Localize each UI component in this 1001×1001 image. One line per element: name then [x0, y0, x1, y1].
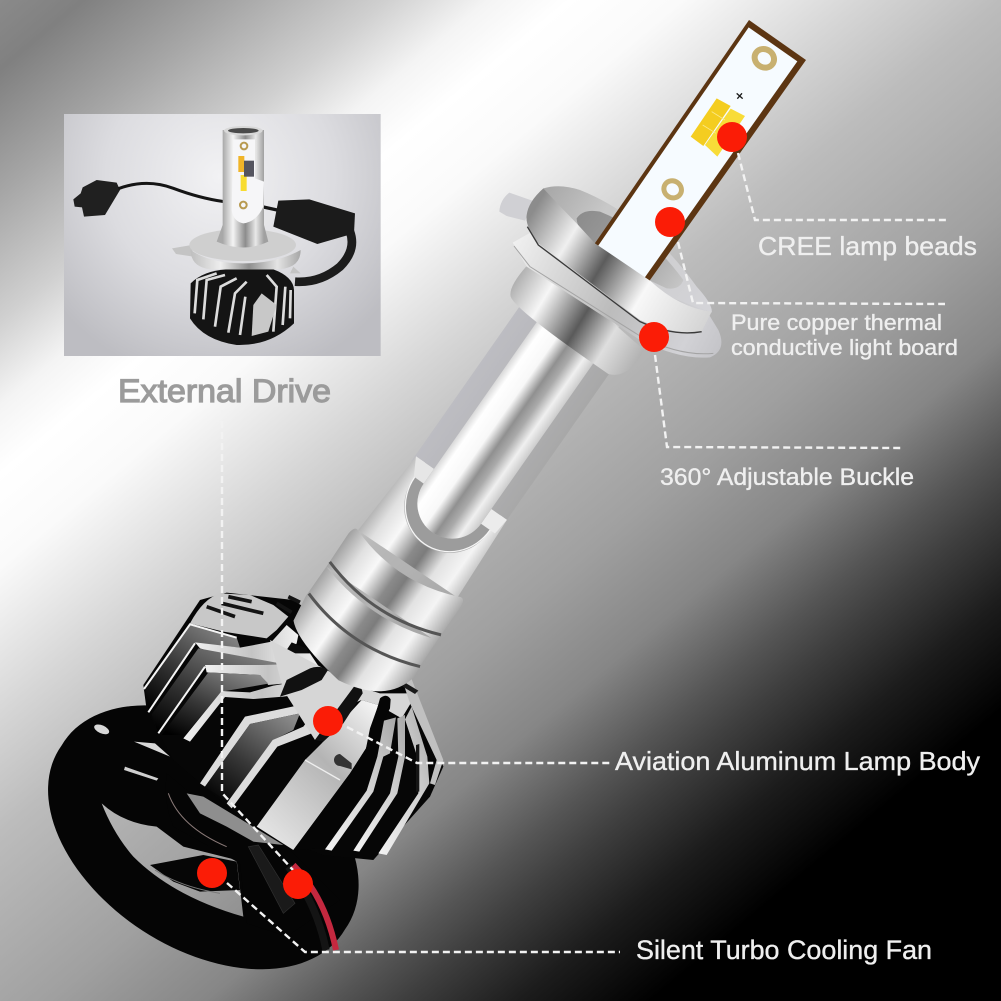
flat plate behind rod	[411, 277, 632, 526]
mount pin	[499, 193, 535, 221]
icon: mini bulb tube	[217, 126, 268, 247]
leader: cooling fan	[227, 883, 620, 952]
wedge below band 3	[162, 672, 268, 735]
fin slit	[416, 744, 419, 792]
heat sink right fins	[257, 640, 443, 855]
label: aluminum body: Aviation Aluminum Lamp Body	[615, 746, 980, 776]
screw recess	[334, 754, 352, 769]
slot near neck	[280, 642, 308, 665]
blade highlight	[155, 870, 220, 893]
label: CREE lamp beads: CREE lamp beads	[758, 231, 977, 261]
dot: aluminum body	[313, 706, 343, 736]
dashed leader lines	[222, 153, 947, 952]
label: cooling fan: Silent Turbo Cooling Fan	[636, 935, 932, 965]
callout labels	[615, 231, 980, 965]
groove 2	[303, 590, 420, 678]
leader: external drive	[222, 410, 293, 870]
solder ring bottom	[661, 177, 685, 201]
neck	[510, 266, 644, 375]
leader: copper board	[678, 242, 945, 304]
dot: copper board	[655, 207, 685, 237]
icon: connector plug	[73, 180, 120, 217]
hub plate	[187, 793, 283, 845]
fin right 3	[378, 707, 429, 855]
fan blade	[150, 855, 240, 892]
band 4	[183, 680, 327, 742]
collar opening	[577, 211, 683, 289]
shade 1	[145, 625, 240, 712]
band 2	[195, 625, 298, 663]
black wire	[288, 867, 326, 950]
icon: mini bulb flange	[172, 229, 301, 273]
wire: plug to bulb	[118, 183, 224, 202]
groove 1	[324, 559, 441, 646]
top cap	[190, 593, 288, 638]
dot: lamp beads	[717, 122, 747, 152]
collar top rim	[543, 186, 712, 313]
plus mark	[737, 93, 743, 99]
solder ring top	[751, 45, 778, 71]
fan base slot 1	[134, 742, 170, 757]
neck collar light	[270, 640, 417, 740]
heat sink left fins	[144, 593, 327, 742]
fan base screw hole	[93, 722, 111, 736]
U-shaped ring	[387, 463, 500, 570]
fin line 3	[158, 667, 205, 733]
leader: CREE lamp beads	[738, 153, 947, 220]
fan base ring	[48, 705, 359, 969]
leader: buckle	[655, 355, 903, 448]
dot: external drive	[283, 869, 313, 899]
leader: aluminum body	[347, 727, 610, 763]
fin right 2	[353, 715, 405, 852]
cable: driver to heat sink	[295, 232, 352, 282]
board white face	[588, 27, 797, 287]
fin E shade	[205, 713, 300, 803]
connector	[248, 845, 295, 913]
fin F	[227, 713, 318, 808]
right slot	[403, 683, 418, 694]
heat sink body	[143, 593, 443, 860]
tail section	[277, 590, 421, 715]
icon: mini bulb heat sink	[190, 269, 294, 345]
wire: bulb to driver	[262, 207, 280, 211]
label: buckle: 360° Adjustable Buckle	[660, 464, 914, 491]
fin line 2	[148, 643, 195, 712]
slot 1	[315, 686, 363, 742]
marker dots	[197, 122, 747, 899]
fin line 1	[144, 624, 237, 689]
LED chip	[691, 98, 745, 157]
centre block	[257, 700, 378, 850]
lower body sleeve	[358, 453, 510, 599]
dot: buckle	[639, 322, 669, 352]
collar wall	[526, 188, 712, 332]
bulb collar and circuit board	[499, 20, 806, 375]
fin right 4	[400, 673, 443, 785]
flange	[513, 223, 721, 358]
central rod	[404, 282, 622, 552]
ring horn left	[406, 456, 434, 484]
bulb tube and body	[276, 263, 649, 715]
fan hub	[166, 773, 340, 937]
hub ring edge	[168, 793, 227, 847]
dot: cooling fan	[197, 858, 227, 888]
board brown edge	[583, 20, 806, 287]
collar groove	[527, 227, 702, 333]
block ridge	[305, 760, 340, 780]
icon: driver box	[273, 199, 355, 244]
label: copper board line 1: Pure copper thermal	[731, 310, 942, 335]
band 3	[205, 653, 320, 685]
fin E	[200, 695, 320, 787]
label: copper board line 2: conductive light board	[731, 335, 958, 360]
heat sink and fan base	[48, 593, 443, 969]
ring horn right	[481, 509, 507, 535]
mid section	[300, 564, 438, 681]
red wire	[293, 865, 336, 950]
shade 2	[152, 648, 285, 733]
panel: external drive photo	[64, 114, 381, 356]
fin right 1	[325, 717, 396, 851]
heading: External Drive: External Drive	[118, 373, 331, 409]
shoulder section	[326, 523, 465, 643]
cap slots	[207, 597, 300, 617]
upper slot	[280, 667, 328, 697]
slot 2	[293, 696, 391, 850]
fan base slot 2	[124, 767, 158, 781]
